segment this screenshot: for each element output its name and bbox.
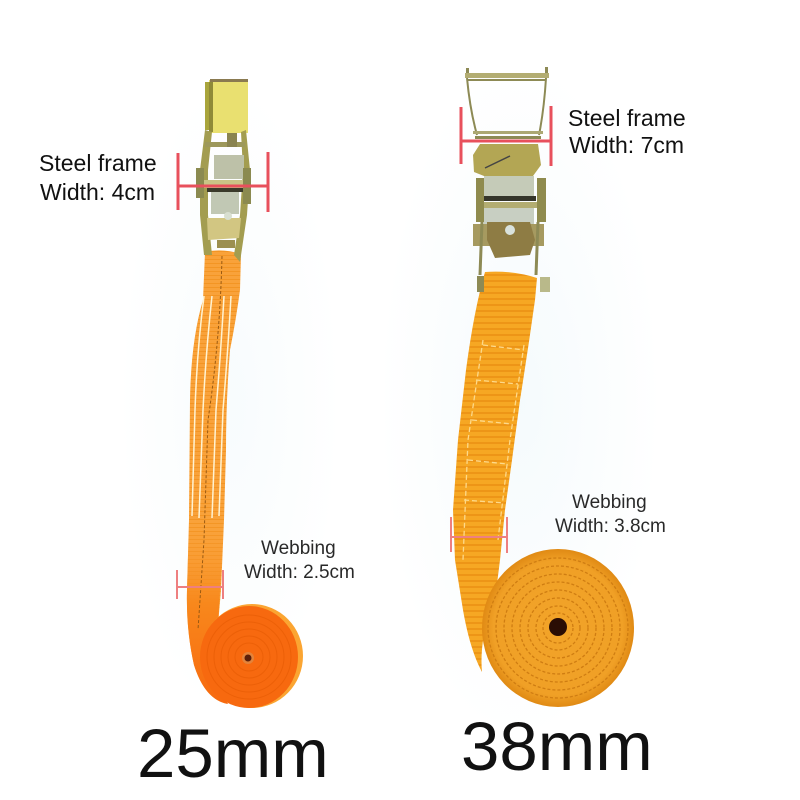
title: 38mm: 38mm — [461, 708, 653, 785]
label: right steel frame: Width: 7cm — [569, 132, 684, 158]
label: left steel frame: Steel frame — [39, 150, 157, 176]
label: left steel frame: Width: 4cm — [40, 179, 155, 205]
right steel frame measure — [461, 106, 551, 166]
left steel frame measure — [178, 152, 268, 212]
label: right steel frame: Steel frame — [568, 105, 686, 131]
right webbing — [453, 272, 537, 672]
right ratchet strap 38mm — [451, 67, 634, 707]
left ratchet strap 25mm — [177, 79, 303, 708]
right webbing stitching — [463, 340, 524, 560]
label: left webbing: Width: 2.5cm — [244, 562, 355, 583]
left webbing — [187, 250, 241, 704]
right webbing measure — [451, 517, 507, 553]
left webbing coil — [200, 604, 303, 708]
left webbing stitching — [192, 296, 231, 518]
left webbing measure — [177, 570, 223, 599]
right webbing coil — [482, 549, 634, 707]
right buckle — [465, 67, 550, 292]
label: right webbing: Width: 3.8cm — [555, 516, 666, 537]
left buckle — [196, 79, 251, 262]
label: left webbing: Webbing — [261, 538, 336, 559]
title: 25mm: 25mm — [137, 715, 329, 792]
label: right webbing: Webbing — [572, 492, 647, 513]
